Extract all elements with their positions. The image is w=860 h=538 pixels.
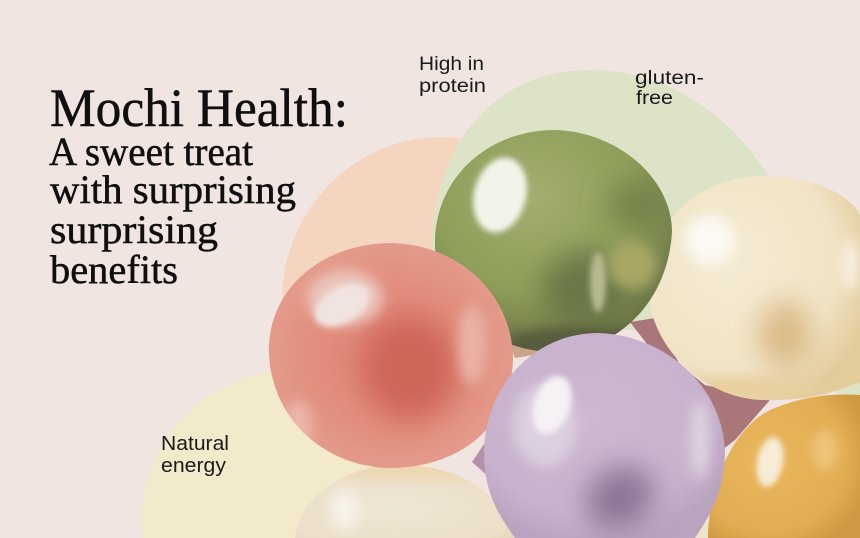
mochi: bottom cream xyxy=(295,464,516,538)
mochi: green xyxy=(435,130,672,363)
pale sliver at right xyxy=(835,378,860,398)
mochi: cream xyxy=(648,176,860,402)
label: gluten-free: free xyxy=(636,87,673,109)
heading: Mochi Health: Mochi Health: xyxy=(50,78,348,138)
label: natural energy: Natural xyxy=(161,433,229,455)
pale sliver at bottom xyxy=(685,515,712,538)
label: high in protein: High in xyxy=(419,53,484,75)
mochi: orange xyxy=(708,393,860,538)
mochi: purple xyxy=(484,333,725,538)
shadow between mochi xyxy=(630,318,770,450)
peach circle xyxy=(282,137,520,300)
subheading line 3: surprising xyxy=(50,207,218,252)
mochi: red xyxy=(269,243,513,468)
green circle xyxy=(432,70,768,330)
label: natural energy: energy xyxy=(161,455,226,477)
subheading line 2: with surprising xyxy=(50,167,296,212)
subheading line 4: benefits xyxy=(50,247,178,292)
title xyxy=(49,78,348,292)
label: gluten-free: gluten- xyxy=(635,67,704,89)
label: high in protein: protein xyxy=(419,75,486,97)
gap below green mochi xyxy=(505,335,565,358)
yellow circle xyxy=(142,371,442,538)
subheading line 1: A sweet treat xyxy=(49,129,253,174)
gap between red and purple mochi xyxy=(472,435,498,485)
